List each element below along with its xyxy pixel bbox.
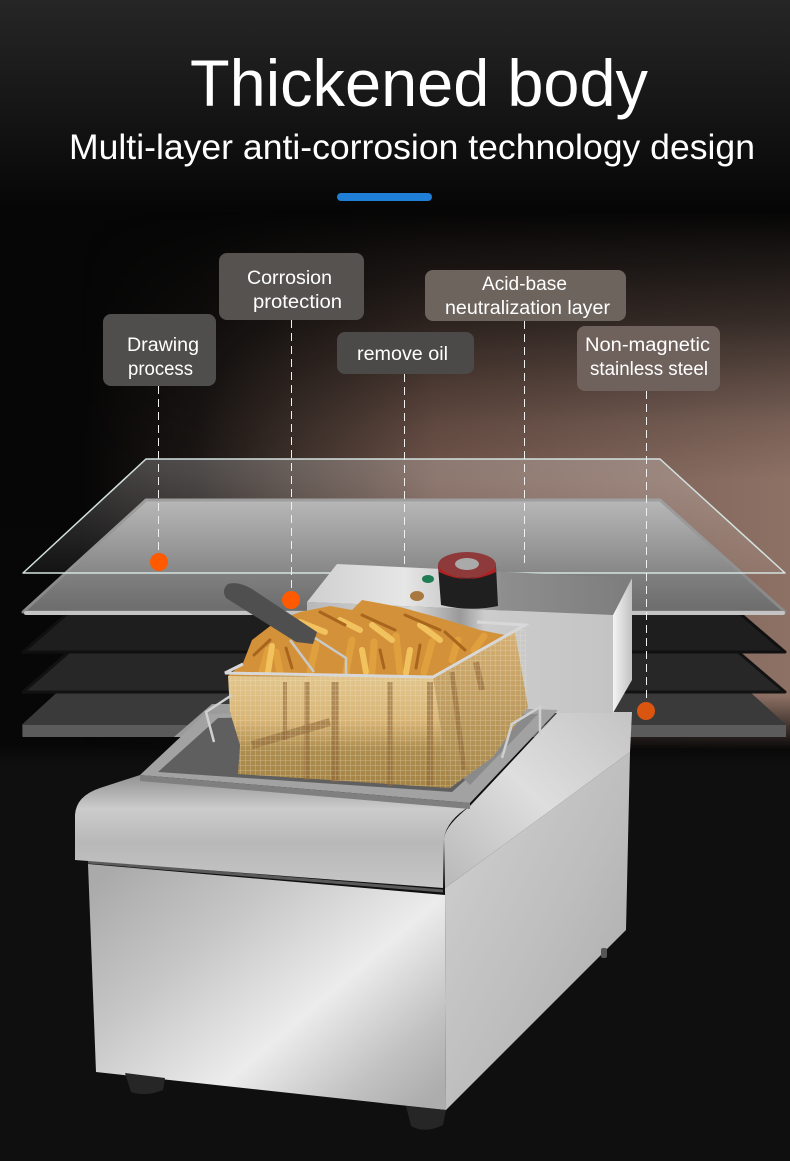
layer 3: dark plate (23, 545, 785, 652)
label: Acid-base neutralization layer: Acid-base (482, 274, 567, 295)
label: Drawing process: Drawing (127, 335, 199, 356)
blue accent bar (337, 193, 432, 201)
layer 4: textured dark plate (23, 585, 785, 692)
basket handle (224, 583, 346, 674)
marker dot: corrosion protection (282, 591, 300, 609)
label: Drawing process (103, 314, 216, 386)
brown fry stripes (252, 662, 482, 786)
fries heap (228, 600, 510, 677)
label: Corrosion protection: protection (253, 292, 342, 313)
dashed connector lines (158, 320, 646, 704)
fryer front lip (75, 775, 470, 888)
shadow line under lip (88, 862, 443, 891)
label: Acid-base neutralization layer (425, 270, 626, 321)
thermostat knob (438, 552, 498, 609)
feet (125, 948, 607, 1130)
marker dot: drawing process (150, 553, 168, 571)
label: remove oil: remove oil (357, 344, 448, 365)
wire mesh plate left (174, 704, 230, 737)
fryer (75, 552, 632, 1130)
label: Corrosion protection (219, 253, 364, 320)
label: Drawing process: process (128, 359, 193, 380)
subtitle: Multi-layer anti-corrosion technology design (69, 128, 755, 167)
indicator lights (410, 575, 434, 601)
title: Thickened body (190, 46, 648, 120)
basket front (228, 676, 450, 788)
fry basket with food (225, 600, 528, 788)
fryer right side panel (445, 752, 630, 1110)
layer 5: bottom dark plate (23, 612, 786, 737)
fryer front panel (88, 864, 446, 1110)
fryer side lip (444, 712, 632, 888)
layer 2: grey plate (23, 500, 785, 615)
layer stack (23, 459, 786, 737)
basket rim (225, 622, 525, 677)
label: remove oil (337, 332, 474, 374)
wire mesh (228, 676, 450, 788)
label: Non-magnetic stainless steel (577, 326, 720, 391)
control box (307, 564, 632, 713)
label: Corrosion protection: Corrosion (247, 268, 332, 289)
label: Acid-base neutralization layer: neutralization layer (445, 298, 611, 319)
background (0, 0, 790, 746)
label: Non-magnetic stainless steel: Non-magnetic (585, 335, 710, 356)
oil tank rim (140, 708, 558, 809)
basket hooks (206, 695, 540, 758)
label: Non-magnetic stainless steel: stainless steel (590, 359, 708, 380)
layer 1: glass plate (23, 459, 785, 573)
marker dot: stainless steel (637, 702, 655, 720)
basket side (433, 632, 528, 788)
